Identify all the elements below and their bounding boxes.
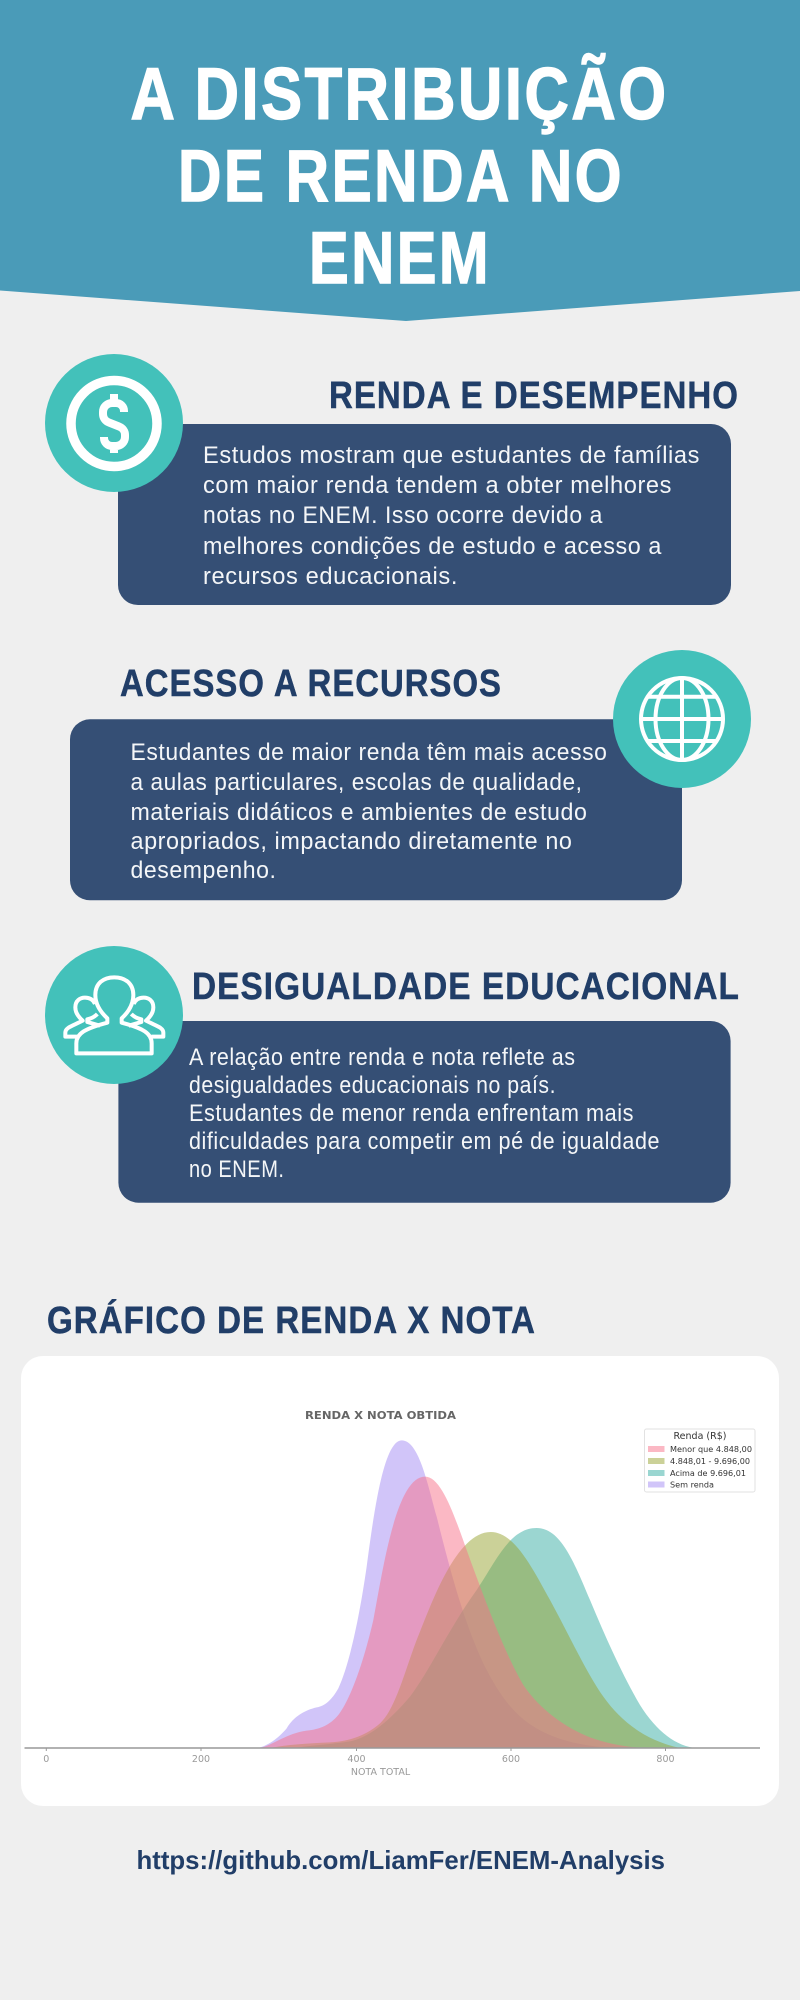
- legend: 4.848,01 - 9.696,00: [670, 1457, 750, 1466]
- title: DE RENDA NO: [178, 136, 624, 217]
- card background: [118, 424, 731, 605]
- title: [130, 54, 668, 299]
- footer link: https://github.com/LiamFer/ENEM-Analysis: [136, 1845, 665, 1875]
- curve: sem renda: [257, 1440, 617, 1748]
- heading: desigualdade educacional: DESIGUALDADE EDUCACIONAL: [192, 966, 740, 1008]
- legend: Renda (R$): [674, 1431, 726, 1442]
- panel: renda e desempenho: [45, 354, 739, 605]
- title: ENEM: [309, 218, 491, 299]
- curve: acima de 9.696,01: [293, 1528, 697, 1748]
- panel: desigualdade educacional: [45, 946, 740, 1203]
- text block: [189, 1044, 660, 1183]
- text block: recursos educacionais.: [203, 563, 458, 590]
- legend: Acima de 9.696,01: [670, 1469, 746, 1478]
- panel: acesso a recursos: [70, 650, 751, 900]
- card background: [70, 719, 682, 900]
- text block: [203, 442, 700, 590]
- text block: materiais didáticos e ambientes de estudo: [130, 799, 588, 826]
- text block: notas no ENEM. Isso ocorre devido a: [203, 502, 603, 529]
- heading: grafico: GRÁFICO DE RENDA X NOTA: [47, 1298, 536, 1342]
- text block: apropriados, impactando diretamente no: [130, 828, 572, 855]
- x axis: 200: [192, 1754, 210, 1765]
- text block: dificuldades para competir em pé de igualdade: [189, 1128, 660, 1155]
- curve: 4.848,01 a 9.696,00: [270, 1532, 680, 1748]
- text block: A relação entre renda e nota reflete as: [189, 1044, 576, 1071]
- text block: Estudos mostram que estudantes de famílias: [203, 442, 700, 469]
- density curves: [257, 1440, 697, 1748]
- text block: melhores condições de estudo e acesso a: [203, 533, 662, 560]
- x axis: 0: [43, 1754, 49, 1765]
- text block: desigualdades educacionais no país.: [189, 1072, 556, 1099]
- chart title: RENDA X NOTA OBTIDA: [305, 1409, 457, 1422]
- heading: renda e desempenho: RENDA E DESEMPENHO: [329, 375, 739, 417]
- text block: a aulas particulares, escolas de qualidade,: [130, 769, 582, 796]
- icon: group of people: [45, 946, 183, 1084]
- panel: chart: [21, 1356, 779, 1806]
- text block: Estudantes de menor renda enfrentam mais: [189, 1100, 634, 1127]
- curve: menor que 4.848,00: [260, 1477, 643, 1748]
- text block: com maior renda tendem a obter melhores: [203, 472, 672, 499]
- legend: [644, 1429, 755, 1492]
- card background: [118, 1021, 731, 1203]
- legend: Sem renda: [670, 1480, 714, 1490]
- legend: Menor que 4.848,00: [670, 1445, 752, 1454]
- text block: [130, 739, 608, 884]
- icon: dollar coin: [45, 354, 183, 492]
- x axis: 400: [347, 1754, 366, 1765]
- text block: Estudantes de maior renda têm mais acesso: [130, 739, 608, 766]
- x axis: 800: [656, 1754, 675, 1765]
- text block: no ENEM.: [189, 1156, 284, 1183]
- x axis: 600: [502, 1754, 520, 1765]
- title: A DISTRIBUIÇÃO: [130, 54, 668, 135]
- header banner: [0, 0, 800, 321]
- axis label: NOTA TOTAL: [351, 1767, 411, 1778]
- icon: globe: [613, 650, 751, 788]
- x axis: [24, 1748, 760, 1778]
- text block: desempenho.: [130, 857, 276, 884]
- heading: acesso a recursos: ACESSO A RECURSOS: [120, 663, 502, 705]
